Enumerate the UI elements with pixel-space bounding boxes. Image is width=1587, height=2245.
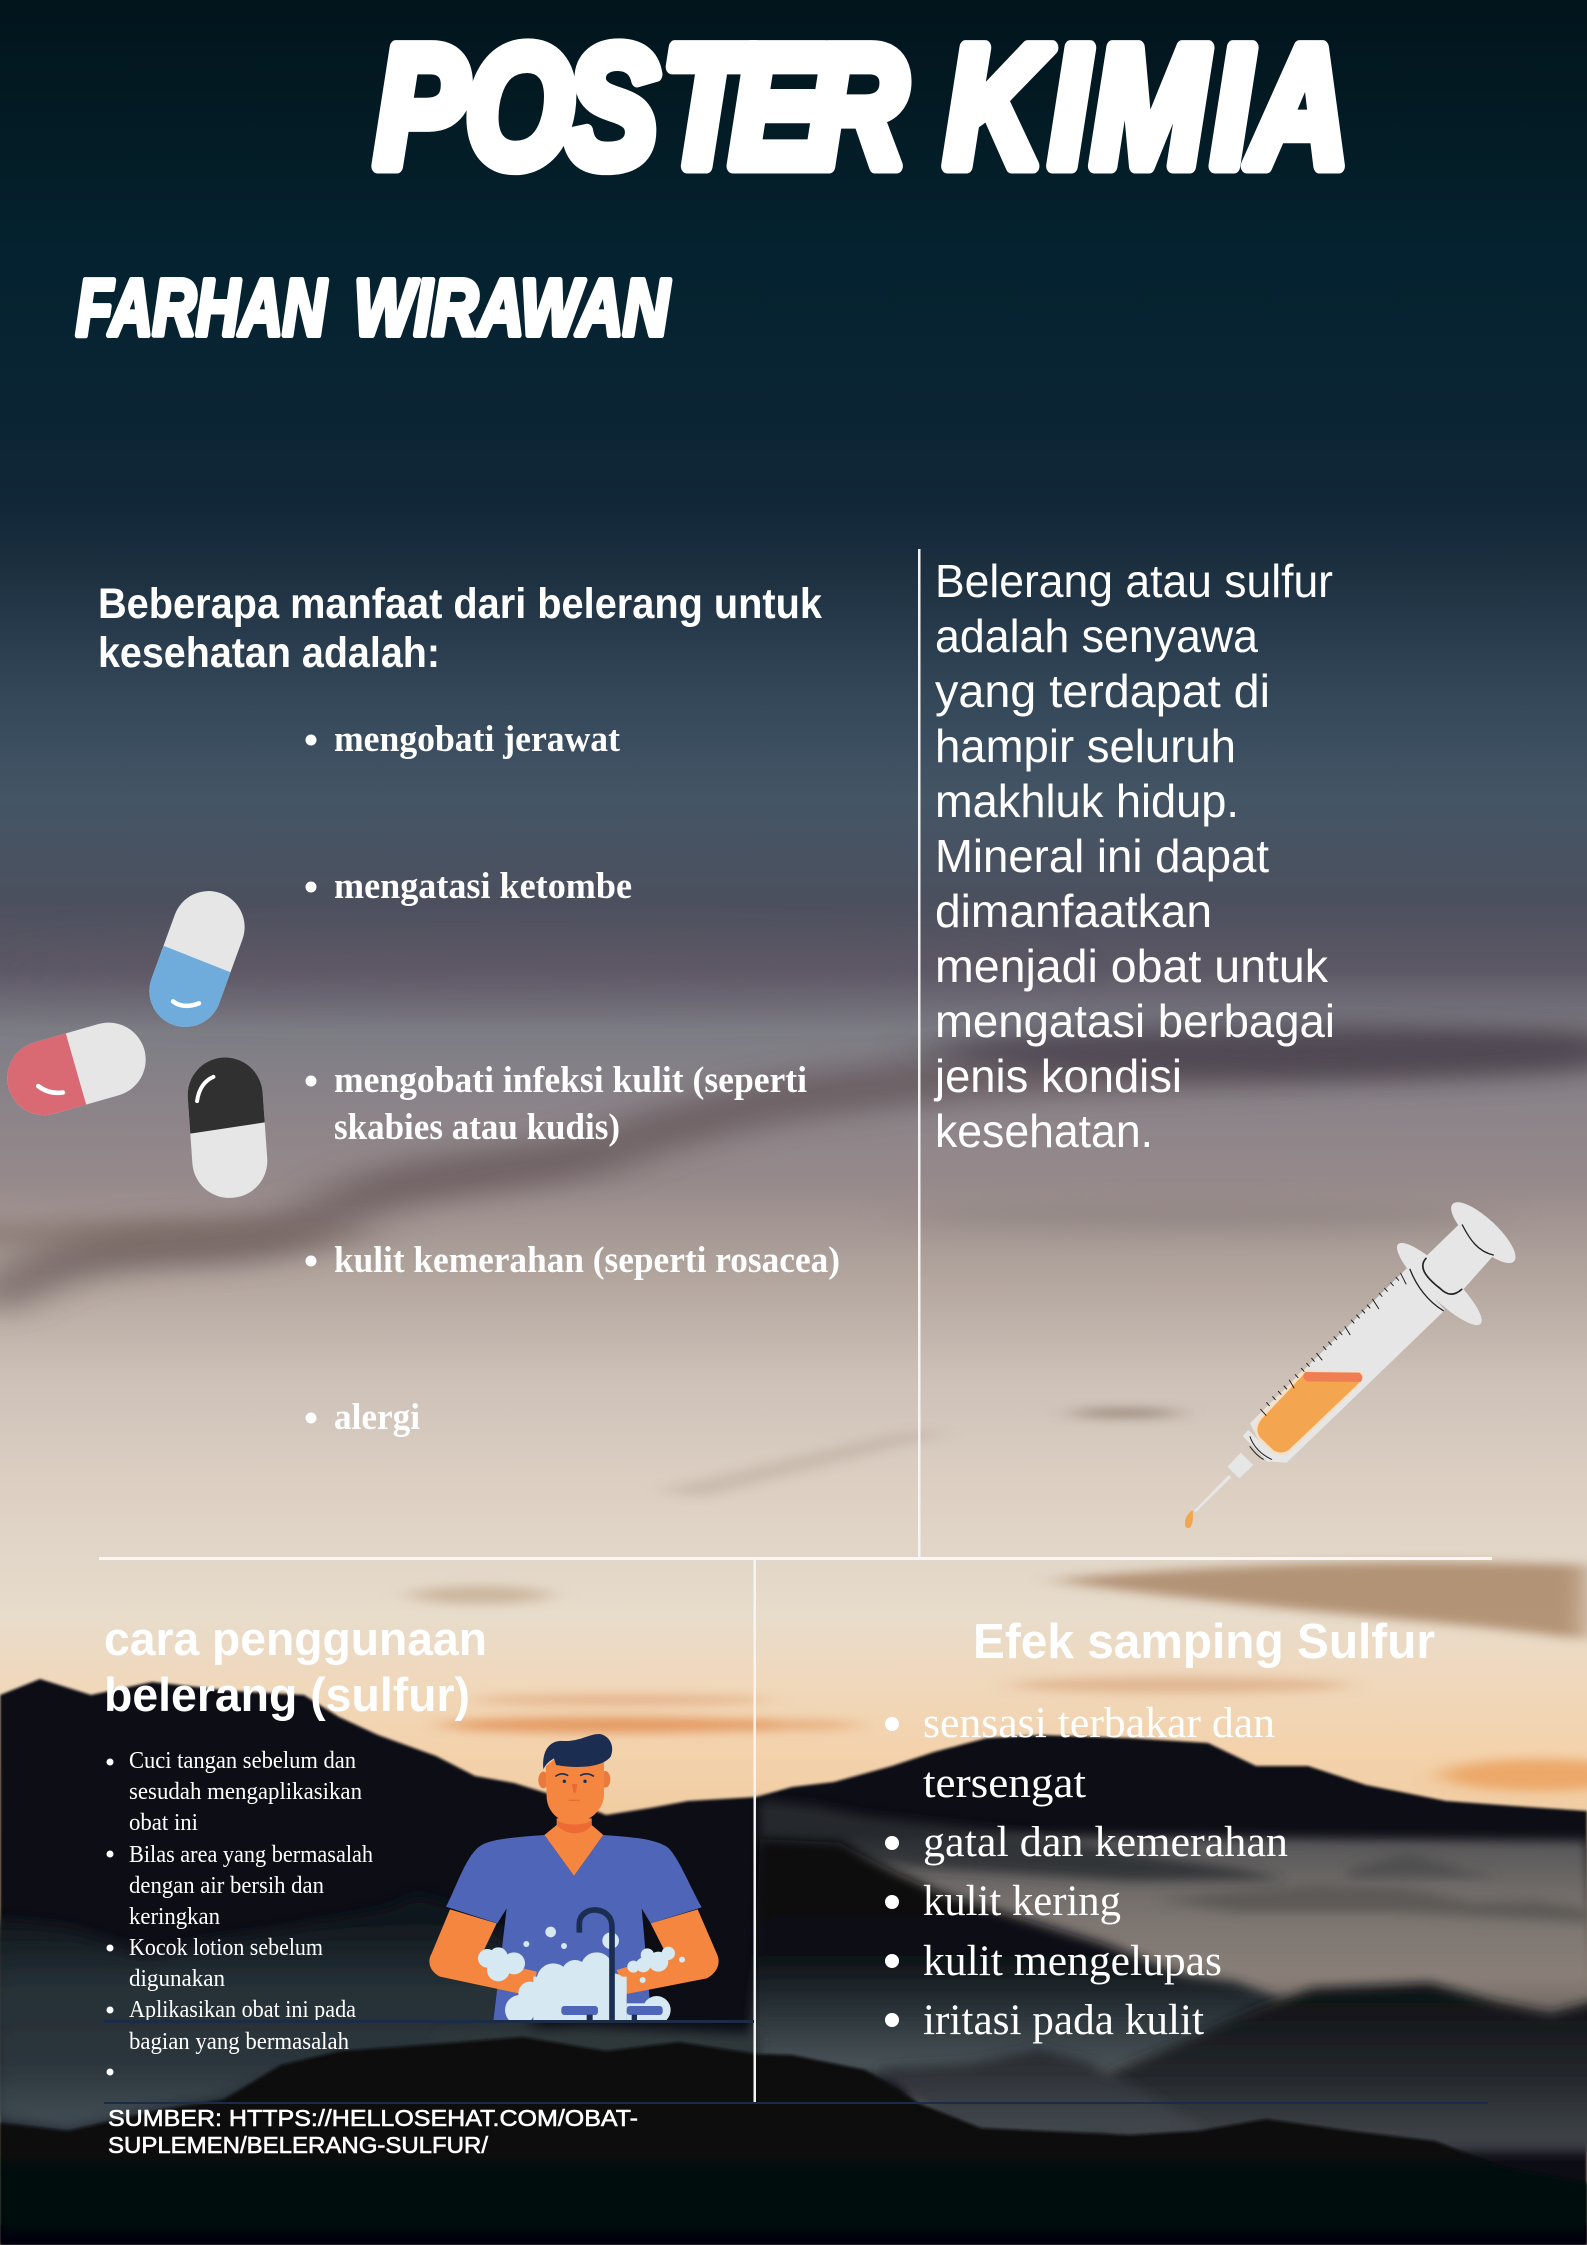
side effects list — [885, 1700, 1288, 2044]
author name: FARHAN — [76, 263, 328, 352]
benefits list: alergi — [334, 1397, 420, 1438]
benefits list — [306, 719, 840, 1438]
benefits list: mengobati infeksi kulit (seperti — [334, 1060, 807, 1101]
hair — [543, 1734, 612, 1769]
neck — [544, 1818, 603, 1876]
usage list: obat ini — [129, 1810, 198, 1836]
benefits list: mengatasi ketombe — [334, 866, 632, 907]
side effects list: kulit mengelupas — [923, 1938, 1222, 1985]
head — [546, 1758, 604, 1823]
side effects heading: Efek samping Sulfur — [973, 1615, 1435, 1669]
panel: side effects — [885, 1615, 1435, 2044]
intro paragraph: Belerang atau sulfur — [935, 555, 1333, 607]
source citation: SUPLEMEN/BELERANG-SULFUR/ — [108, 2132, 489, 2158]
usage heading — [104, 1612, 487, 1721]
usage heading: cara penggunaan — [104, 1612, 487, 1665]
source citation: SUMBER: HTTPS://HELLOSEHAT.COM/OBAT- — [108, 2105, 638, 2131]
foam — [478, 1927, 685, 2025]
dividers — [99, 548, 1492, 2104]
usage list: sesudah mengaplikasikan — [129, 1779, 362, 1805]
benefits list: skabies atau kudis) — [334, 1107, 620, 1148]
usage list: Aplikasikan obat ini pada — [129, 1997, 356, 2023]
intro paragraph: menjadi obat untuk — [935, 940, 1329, 992]
counter line — [104, 2020, 754, 2023]
left mist — [0, 1895, 761, 2134]
benefits list: kulit kemerahan (seperti rosacea) — [334, 1240, 840, 1281]
author name: WIRAWAN — [354, 263, 671, 352]
benefits heading: kesehatan adalah: — [98, 629, 440, 677]
side effects list: sensasi terbakar dan — [923, 1700, 1275, 1747]
illustration: man washing hands — [429, 1734, 719, 2025]
intro paragraph: yang terdapat di — [935, 665, 1270, 717]
intro paragraph: dimanfaatkan — [935, 885, 1212, 937]
intro paragraph: mengatasi berbagai — [935, 995, 1335, 1047]
usage list: Bilas area yang bermasalah — [129, 1842, 373, 1868]
usage list: digunakan — [129, 1966, 225, 1992]
intro paragraph: adalah senyawa — [935, 610, 1258, 662]
benefits heading: Beberapa manfaat dari belerang untuk — [98, 580, 822, 628]
benefits heading — [98, 580, 822, 677]
intro paragraph: jenis kondisi — [933, 1050, 1182, 1102]
usage heading: belerang (sulfur) — [104, 1668, 470, 1721]
source citation — [108, 2105, 638, 2158]
intro paragraph: makhluk hidup. — [935, 775, 1239, 827]
intro paragraph: Mineral ini dapat — [935, 830, 1269, 882]
title: POSTER KIMIA — [375, 11, 1349, 204]
icon: syringe — [1185, 1194, 1524, 1528]
panel: usage — [104, 1612, 487, 2076]
shirt — [446, 1835, 702, 2022]
icon: capsules — [0, 881, 270, 1200]
intro paragraph — [933, 555, 1335, 1157]
panel: benefits — [98, 580, 840, 1438]
author name — [76, 263, 671, 352]
icon: red capsule — [0, 1014, 154, 1124]
arms — [429, 1909, 719, 1994]
intro paragraph: hampir seluruh — [935, 720, 1236, 772]
ears — [538, 1771, 610, 1788]
side effects list: gatal dan kemerahan — [923, 1819, 1288, 1866]
usage list: dengan air bersih dan — [129, 1873, 324, 1899]
icon: blue capsule — [139, 881, 255, 1037]
intro paragraph: kesehatan. — [935, 1105, 1153, 1157]
benefits list: mengobati jerawat — [334, 719, 621, 760]
usage list: Cuci tangan sebelum dan — [129, 1748, 356, 1774]
usage list: keringkan — [129, 1904, 220, 1930]
face — [556, 1774, 593, 1800]
usage list: Kocok lotion sebelum — [129, 1935, 323, 1961]
right mountains — [749, 1801, 1587, 2152]
icon: black capsule — [185, 1055, 270, 1200]
side effects list: tersengat — [923, 1760, 1086, 1807]
usage list — [106, 1748, 373, 2076]
side effects list: kulit kering — [923, 1878, 1121, 1925]
faucet — [561, 1910, 663, 2023]
usage list: bagian yang bermasalah — [129, 2029, 349, 2055]
side effects list: iritasi pada kulit — [923, 1997, 1204, 2044]
